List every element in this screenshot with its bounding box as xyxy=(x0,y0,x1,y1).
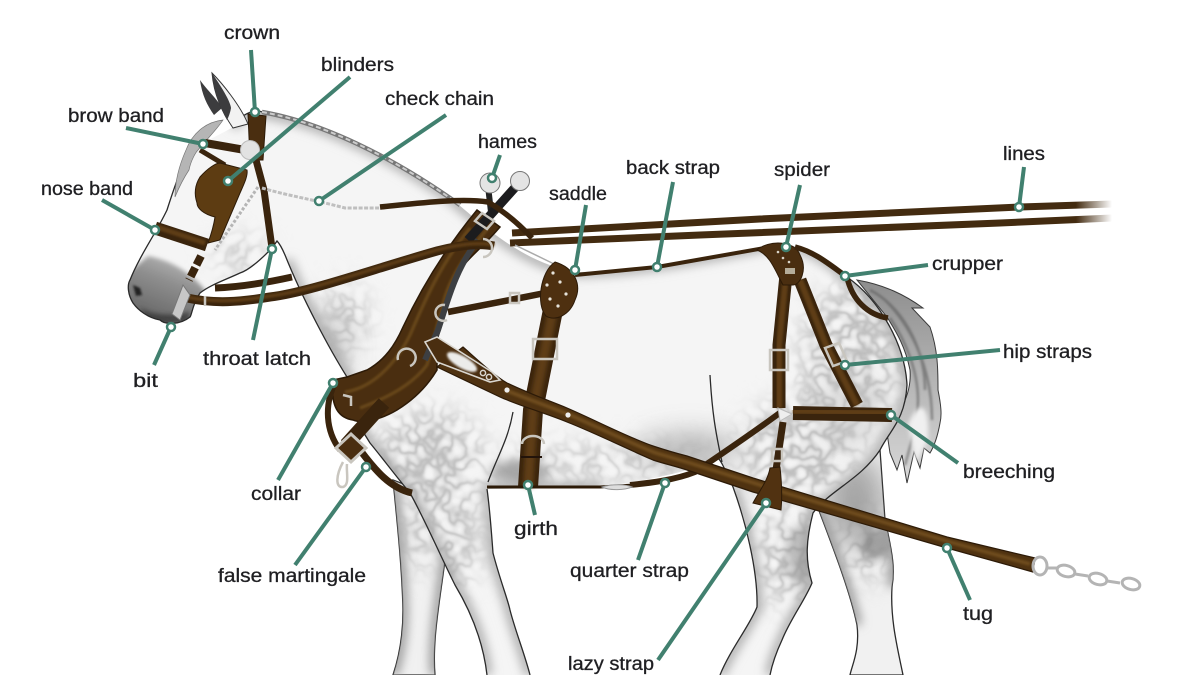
far driving line behind neck xyxy=(215,277,292,288)
label: throat latch: throat latch xyxy=(203,349,311,370)
false martingale xyxy=(328,385,412,493)
label: girth: girth xyxy=(514,519,558,540)
leader: spider xyxy=(782,185,800,251)
shading and dapples xyxy=(120,100,940,675)
label: false martingale: false martingale xyxy=(218,566,366,587)
leader: quarter strap xyxy=(638,479,669,560)
label: breeching: breeching xyxy=(963,462,1055,483)
leader: blinders xyxy=(224,77,350,185)
label: crown: crown xyxy=(224,23,280,44)
label: hip straps: hip straps xyxy=(1003,342,1092,363)
leader: crupper xyxy=(841,265,928,280)
hip straps and breeching xyxy=(757,243,892,421)
leader: false martingale xyxy=(295,463,370,565)
collar xyxy=(332,210,500,422)
belly band xyxy=(487,484,650,487)
label: saddle: saddle xyxy=(549,184,607,205)
horse outline xyxy=(128,111,907,675)
label: nose band: nose band xyxy=(41,179,133,200)
leader: lazy strap xyxy=(658,499,770,660)
leader: throat latch xyxy=(253,245,276,340)
bridle xyxy=(155,114,272,320)
back strap xyxy=(435,245,770,321)
leader: hip straps xyxy=(841,350,1000,369)
lines xyxy=(510,204,1112,243)
leader: back strap xyxy=(653,182,673,271)
leader: breeching xyxy=(887,411,958,463)
leader: girth xyxy=(524,481,535,515)
forelock xyxy=(175,120,223,197)
leader: crown xyxy=(251,50,259,116)
leader: bit xyxy=(154,323,175,365)
lazy strap xyxy=(753,422,783,510)
label: hames: hames xyxy=(478,132,537,153)
label: collar: collar xyxy=(251,484,302,505)
leader: check chain xyxy=(315,115,446,205)
label: back strap: back strap xyxy=(626,158,720,179)
horse body xyxy=(128,111,907,675)
mane crest xyxy=(262,112,460,205)
label: spider: spider xyxy=(774,160,831,181)
quarter strap xyxy=(602,412,781,490)
tug chain xyxy=(1033,557,1141,592)
label: lazy strap: lazy strap xyxy=(568,654,654,675)
far legs xyxy=(380,450,920,675)
leader: brow band xyxy=(126,128,207,148)
check rein xyxy=(380,201,532,238)
label: check chain: check chain xyxy=(385,89,494,110)
near driving line xyxy=(187,239,494,306)
leader: saddle xyxy=(571,205,586,274)
leader: hames xyxy=(488,155,500,182)
leader: tug xyxy=(943,544,970,600)
crupper xyxy=(795,247,888,318)
label: lines: lines xyxy=(1003,144,1045,165)
leader: nose band xyxy=(102,200,159,234)
label: blinders: blinders xyxy=(321,55,394,76)
ears xyxy=(200,73,248,128)
harness xyxy=(155,114,1141,592)
label: quarter strap: quarter strap xyxy=(570,561,689,582)
hames xyxy=(468,172,530,240)
check chain xyxy=(262,188,380,208)
label: crupper: crupper xyxy=(932,254,1004,275)
leader lines and dots xyxy=(102,50,1024,660)
label: brow band: brow band xyxy=(68,106,164,127)
leader: lines xyxy=(1015,167,1024,211)
leader: collar xyxy=(278,379,337,480)
label: tug: tug xyxy=(963,604,993,625)
tail xyxy=(857,280,941,483)
saddle and girth xyxy=(521,262,578,487)
label: bit: bit xyxy=(133,371,159,392)
tug xyxy=(425,337,1035,572)
horse illustration xyxy=(120,73,941,675)
